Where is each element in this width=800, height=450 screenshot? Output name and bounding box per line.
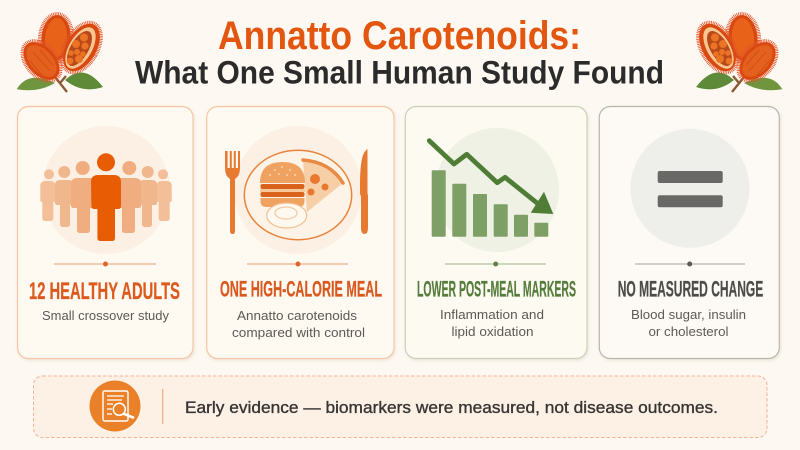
icon: knife xyxy=(360,149,368,234)
panel: participants xyxy=(18,106,193,358)
callout: early evidence banner xyxy=(34,376,767,438)
text: annatto compared with control: compared with control xyxy=(232,325,365,340)
text: annatto compared with control: Annatto carotenoids xyxy=(237,308,358,323)
icon: fork xyxy=(225,151,240,234)
heading: one high-calorie meal: ONE HIGH-CALORIE MEAL xyxy=(220,276,382,302)
panel: meal xyxy=(207,106,394,358)
text: blood sugar, insulin or cholesterol xyxy=(631,307,746,339)
icon: group of people xyxy=(40,153,172,241)
text: annatto compared with control xyxy=(232,308,365,340)
text: inflammation and lipid oxidation: lipid oxidation xyxy=(452,324,534,339)
arrow: downward trend xyxy=(429,141,553,214)
icon: document with magnifier xyxy=(90,380,140,432)
title line 2: What One Small Human Study Found xyxy=(135,54,664,90)
panel: no measured change xyxy=(599,106,779,358)
text: early evidence statement: Early evidence — biomarkers were measured, not disease outcomes. xyxy=(185,399,718,417)
icon: equals sign xyxy=(658,171,723,207)
icon: annatto pods right xyxy=(691,13,783,92)
bar chart xyxy=(432,170,548,237)
text: inflammation and lipid oxidation xyxy=(440,307,544,339)
text: inflammation and lipid oxidation: Inflammation and xyxy=(440,307,544,322)
title xyxy=(135,14,664,90)
text: small crossover study: Small crossover study xyxy=(42,308,169,323)
panel: lower markers xyxy=(405,106,587,358)
icon: plate with burger and pizza xyxy=(244,150,352,240)
title line 1: Annatto Carotenoids: xyxy=(218,14,581,58)
icon: annatto pods left xyxy=(16,13,108,92)
heading: 12 healthy adults: 12 HEALTHY ADULTS xyxy=(29,278,180,305)
text: blood sugar, insulin or cholesterol: Blood sugar, insulin xyxy=(631,307,746,322)
panel: lower markers: LOWER POST-MEAL MARKERS xyxy=(417,276,576,302)
text: blood sugar, insulin or cholesterol: or cholesterol xyxy=(648,324,729,339)
